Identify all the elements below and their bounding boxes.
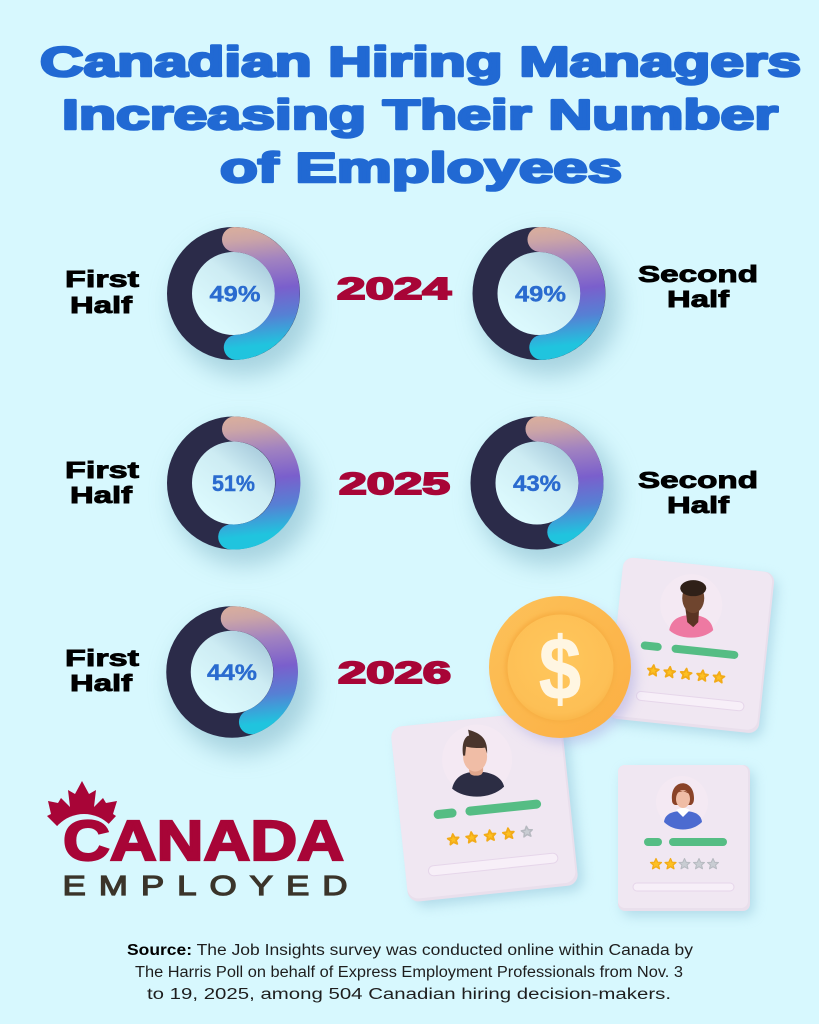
source note: to 19, 2025, among 504 Canadian hiring decision-makers. [147,986,671,1003]
label: first half 2026: Half [70,670,132,696]
avatar [442,725,512,797]
title: Increasing Their Number [62,91,778,138]
label: first half 2024: First [65,266,140,292]
logo: Canada Employed: EMPLOYED [62,869,348,901]
title [40,38,801,191]
label: first half 2025: Half [70,482,132,508]
title: of Employees [220,144,622,191]
label: second half 2024: Half [667,286,729,312]
label: first half 2025: First [65,457,140,483]
avatar [660,574,722,638]
donut: 2024 first half 49%: 49% [210,282,260,306]
icon: gold dollar coin [489,596,636,744]
label: first half 2025 [65,457,140,508]
donut: 2026 first half 44%: 44% [207,660,257,685]
source note: Source: The Job Insights survey was conducted online within Canada by [127,942,693,959]
title: Canadian Hiring Managers [40,38,801,85]
rating bars [644,838,662,846]
year 2026: 2026 [338,655,451,690]
logo: Canada Employed: CANADA [63,809,344,873]
rating bars [433,808,457,819]
label: first half 2026: First [65,645,140,671]
avatar [656,776,708,830]
card: bottom right candidate [618,765,754,916]
source note [127,942,693,1003]
stars: five [647,665,725,683]
donut: 2024 second half 49% [479,236,619,376]
donut: 2025 second half 43%: 43% [513,471,561,496]
icon: gold dollar coin: $ [539,619,581,718]
label: first half 2024: Half [70,292,132,318]
label: first half 2024 [65,266,140,318]
donut: 2024 second half 49%: 49% [515,282,566,306]
donut: 2025 first half 51%: 51% [212,471,255,496]
rating bars [640,641,662,651]
label: second half 2024 [638,261,758,312]
donut: 2025 first half 51% [174,425,314,565]
label: second half 2024: Second [638,261,758,287]
donut: 2024 first half 49% [174,236,314,376]
donut: 2026 first half 44% [172,614,312,754]
stars: four of five [447,826,533,845]
icon: maple leaf [47,781,117,840]
label: second half 2025 [638,467,758,518]
card: top right candidate [606,557,779,739]
label: second half 2025: Second [638,467,758,493]
year 2025: 2025 [339,466,450,501]
label: first half 2026 [65,645,140,696]
label: second half 2025: Half [667,492,729,518]
logo: Canada Employed [47,781,348,901]
year 2024: 2024 [337,271,452,306]
card: left candidate [390,709,584,908]
donut: 2025 second half 43% [477,425,617,565]
stars: two of five [650,858,718,869]
source note: The Harris Poll on behalf of Express Employment Professionals from Nov. 3 [135,964,683,981]
